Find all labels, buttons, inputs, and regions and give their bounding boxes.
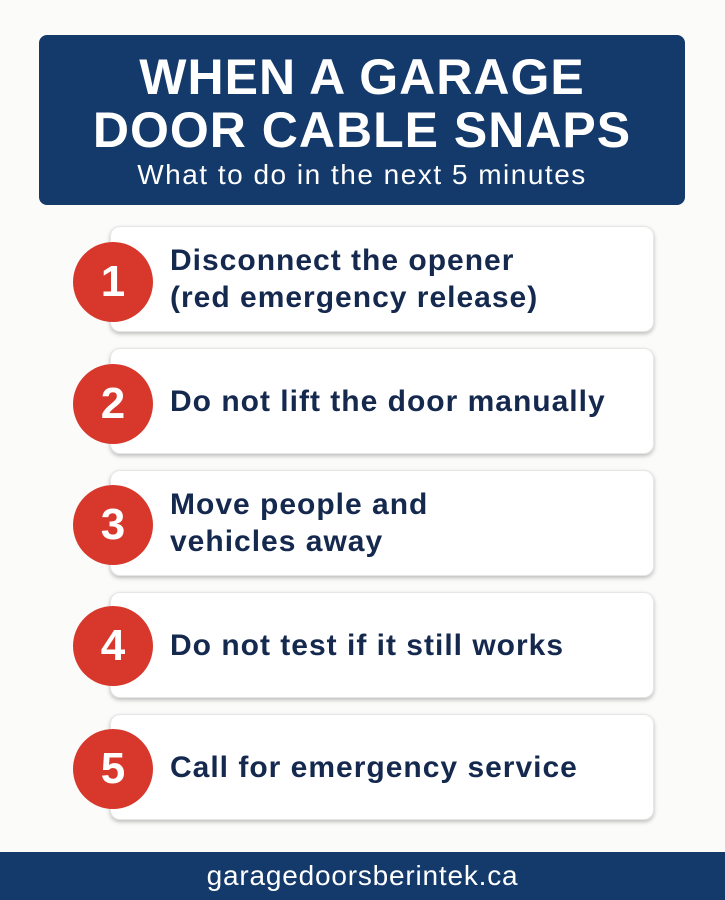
title	[93, 49, 631, 158]
step 5 number	[73, 729, 153, 809]
step 5 card	[110, 714, 654, 820]
step 1 number	[73, 242, 153, 322]
step 5 number: 5	[101, 744, 125, 793]
step 1 card	[110, 226, 654, 332]
title: DOOR CABLE SNAPS	[93, 102, 631, 158]
title: WHEN A GARAGE	[139, 49, 585, 105]
footer website: garagedoorsberintek.ca	[207, 860, 518, 891]
step 4 number: 4	[101, 621, 125, 670]
footer website	[0, 852, 725, 900]
step 3 card: vehicles away	[170, 525, 383, 558]
step 1 card: Disconnect the opener	[170, 244, 514, 277]
step 2 card: Do not lift the door manually	[170, 384, 606, 418]
step 2 number	[73, 364, 153, 444]
step 2 number: 2	[101, 379, 125, 428]
step 3 card	[110, 470, 654, 576]
header banner	[39, 35, 685, 205]
step 3 card: Move people and	[170, 488, 428, 521]
step 3 number: 3	[101, 500, 125, 549]
step 4 card	[110, 592, 654, 698]
step 1 card: (red emergency release)	[170, 281, 538, 314]
step 5 card: Call for emergency service	[170, 750, 578, 784]
subtitle: What to do in the next 5 minutes	[137, 159, 587, 190]
step 2 card	[110, 348, 654, 454]
step 4 card: Do not test if it still works	[170, 628, 564, 662]
step 3 number	[73, 485, 153, 565]
step 1 number: 1	[101, 257, 125, 306]
step 4 number	[73, 606, 153, 686]
